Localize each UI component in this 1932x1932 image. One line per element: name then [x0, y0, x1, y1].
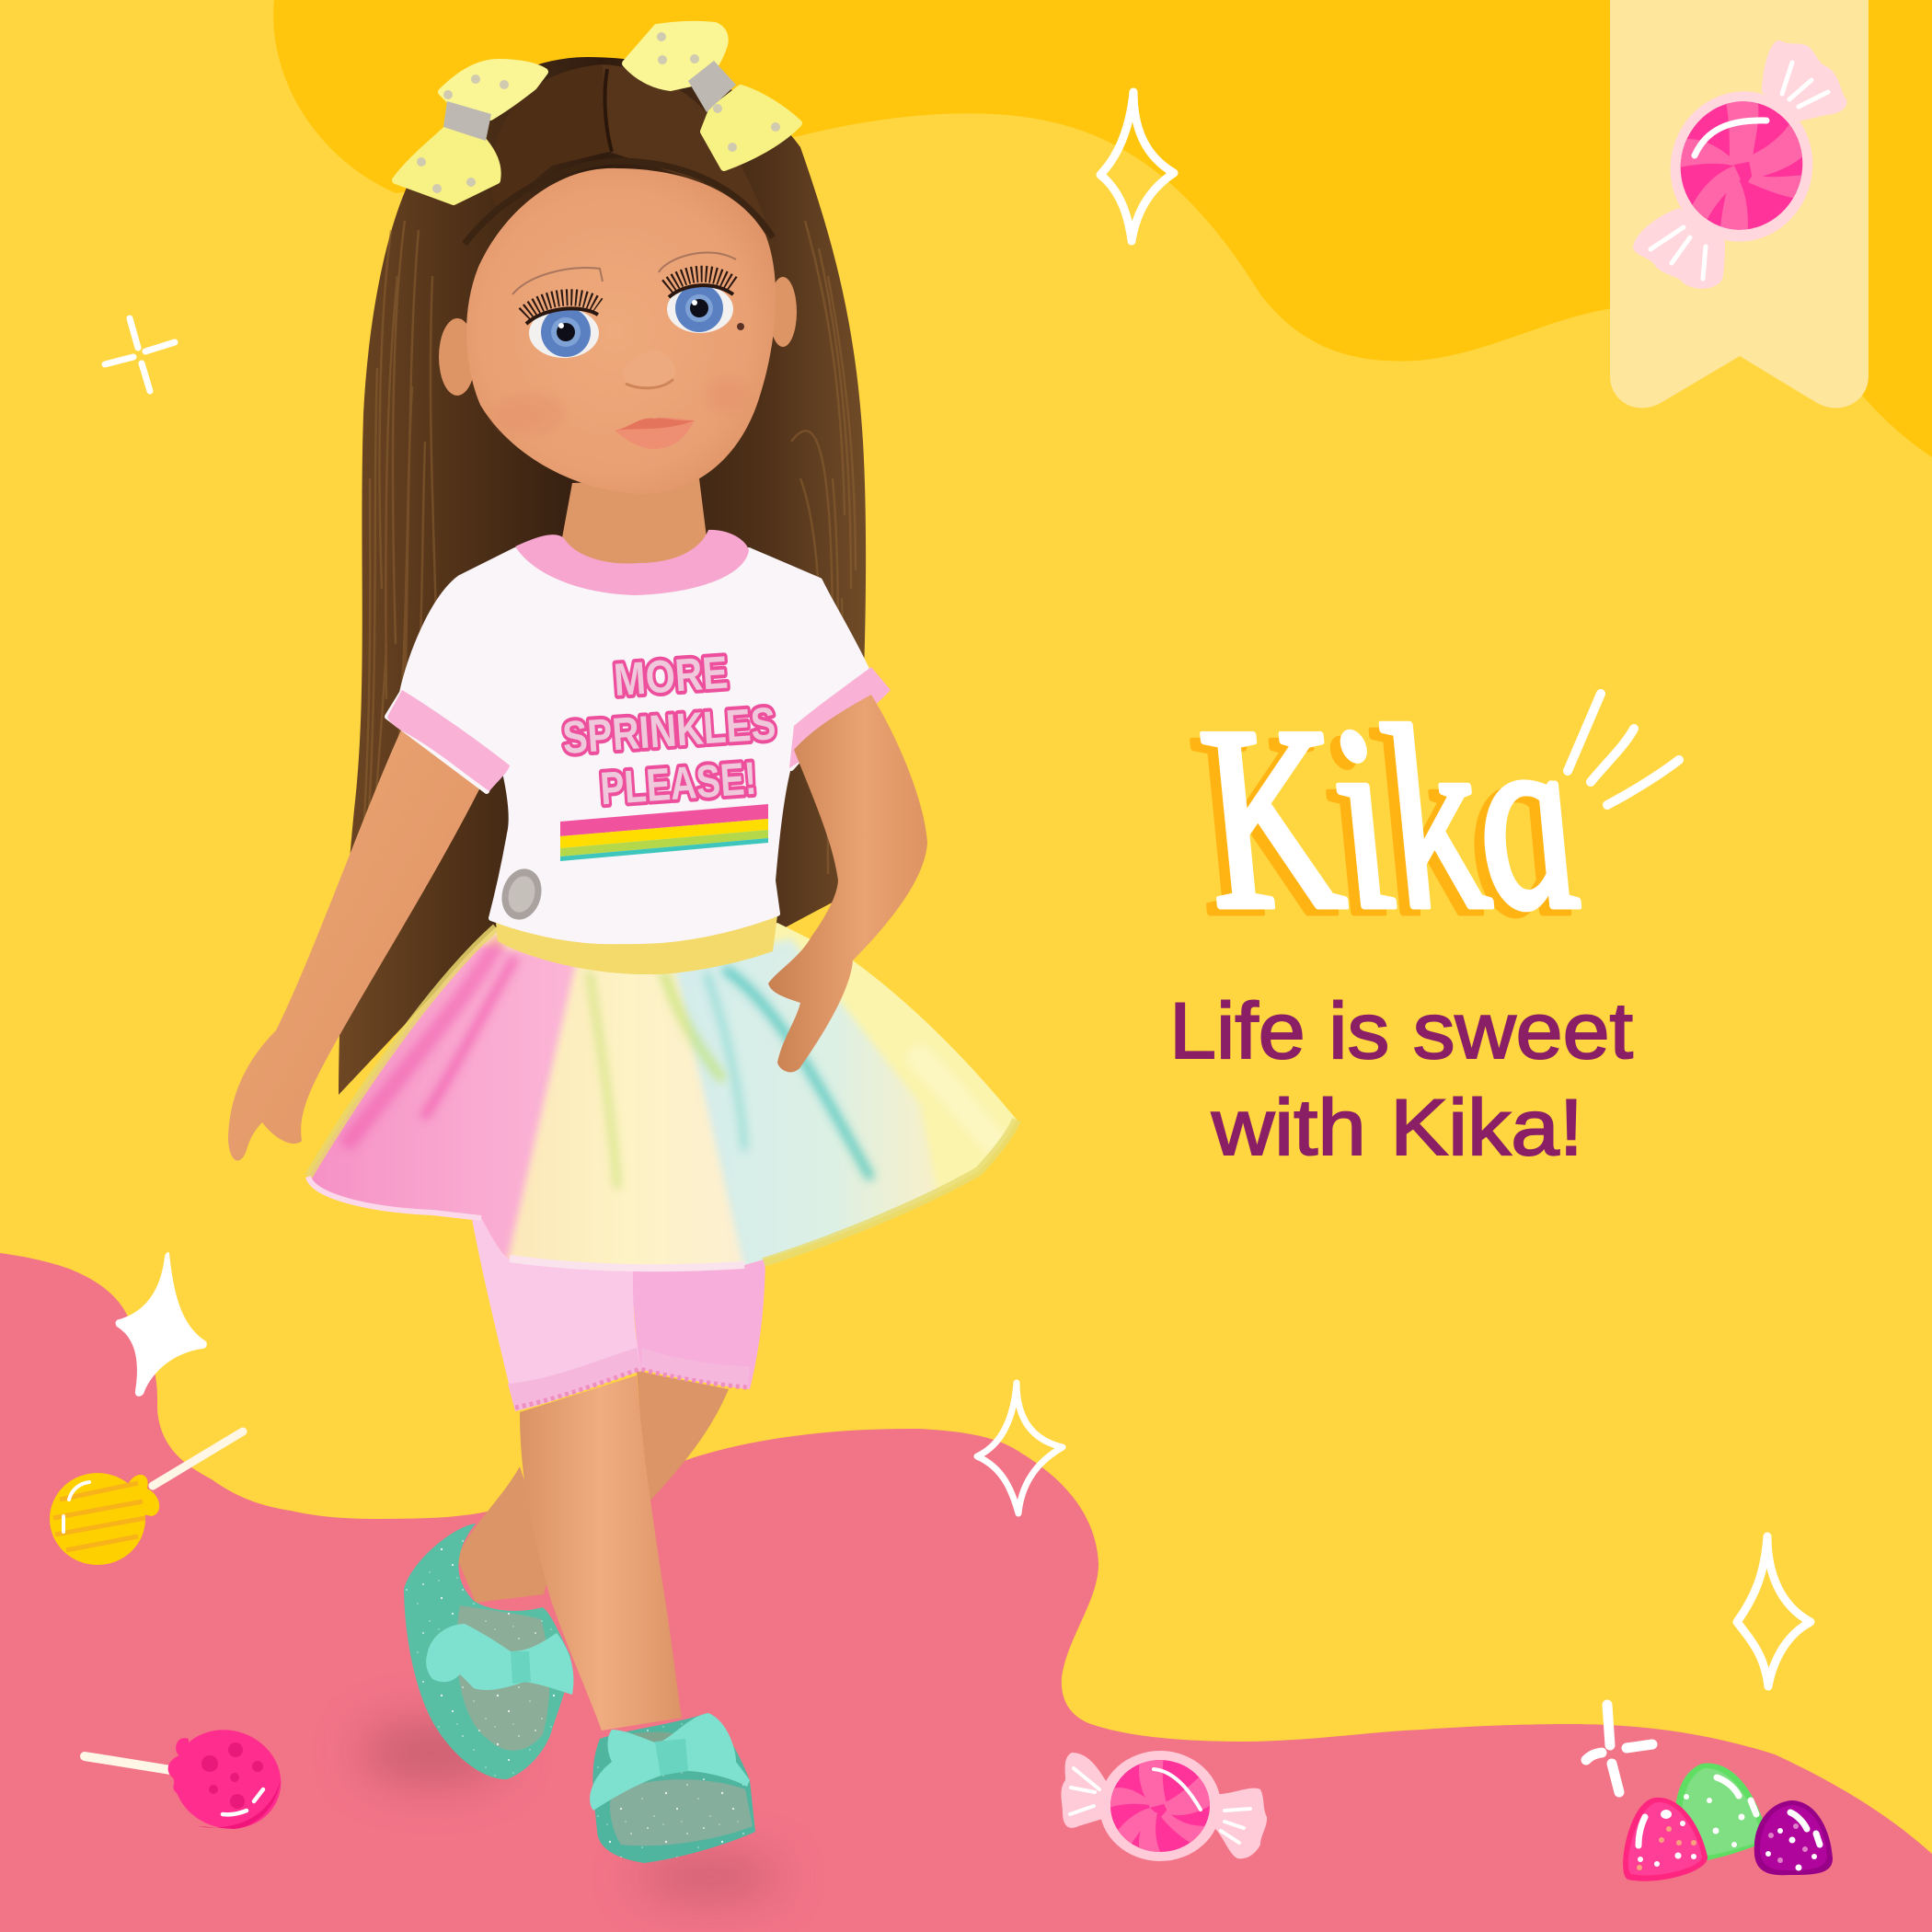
pink gumdrop — [1623, 1798, 1708, 1881]
purple gumdrop — [1754, 1800, 1833, 1875]
tagline — [1169, 987, 1633, 1172]
front shoe — [590, 1713, 755, 1863]
doll figure — [228, 25, 1030, 1897]
leggings — [471, 1214, 765, 1411]
skirt — [294, 911, 1030, 1288]
title: Kika: Kika — [1155, 680, 1594, 970]
shirt slogan: MORE — [612, 647, 730, 706]
beauty mark — [737, 323, 744, 330]
eyebrows — [512, 252, 736, 294]
nose — [622, 350, 675, 388]
icon: gumdrops — [1623, 1764, 1833, 1881]
icon: cross sparkle left — [105, 318, 175, 391]
eye left — [524, 297, 599, 358]
right arm and hand — [768, 695, 927, 1072]
bow on front shoe — [590, 1713, 750, 1811]
back shoe — [404, 1524, 573, 1779]
t-shirt — [387, 530, 891, 941]
title: Kika: Kika — [1165, 673, 1604, 963]
icon: wrapped candy in banner — [1633, 40, 1846, 289]
ribbon banner — [1610, 0, 1869, 408]
background wave: bottom pink — [0, 1253, 1932, 1932]
shirt slogan — [557, 643, 781, 817]
cheeks — [494, 377, 747, 434]
ears — [439, 277, 797, 396]
background wave: top amber — [273, 0, 1932, 457]
green gumdrop — [1674, 1764, 1769, 1865]
icon: pink lollipop — [85, 1715, 295, 1844]
shoe shadows — [359, 1721, 782, 1897]
accent dashes — [1568, 694, 1679, 805]
hair — [339, 57, 866, 1095]
lips — [615, 418, 695, 449]
left hair bow — [396, 63, 545, 201]
tagline: with Kika! — [1211, 1084, 1583, 1172]
icon: outline sparkle middle — [977, 1383, 1063, 1513]
bow on back shoe — [426, 1624, 573, 1695]
shirt slogan: PLEASE! — [599, 753, 758, 814]
collar — [515, 530, 749, 595]
left arm — [228, 722, 483, 1160]
shirt slogan: SPRINKLES — [561, 697, 777, 764]
shirt stripes — [560, 804, 768, 861]
back leg — [457, 1371, 729, 1603]
icon: outline sparkle top — [1100, 92, 1174, 241]
eye right — [667, 274, 734, 333]
icon: outline sparkle right — [1737, 1536, 1811, 1686]
icon: solid sparkle — [116, 1252, 207, 1397]
left cuff — [387, 690, 510, 791]
icon: yellow lollipop — [50, 1432, 243, 1565]
charm medal — [496, 865, 547, 924]
front leg — [520, 1375, 682, 1731]
right cuff — [789, 667, 891, 768]
waistband — [496, 915, 777, 974]
icon: wrapped candy bottom — [1061, 1751, 1267, 1861]
icon: cross sparkle bottom right — [1586, 1705, 1652, 1792]
tagline: Life is sweet — [1169, 987, 1633, 1075]
neck — [561, 478, 708, 569]
right hair bow — [626, 25, 799, 167]
face — [466, 168, 776, 494]
